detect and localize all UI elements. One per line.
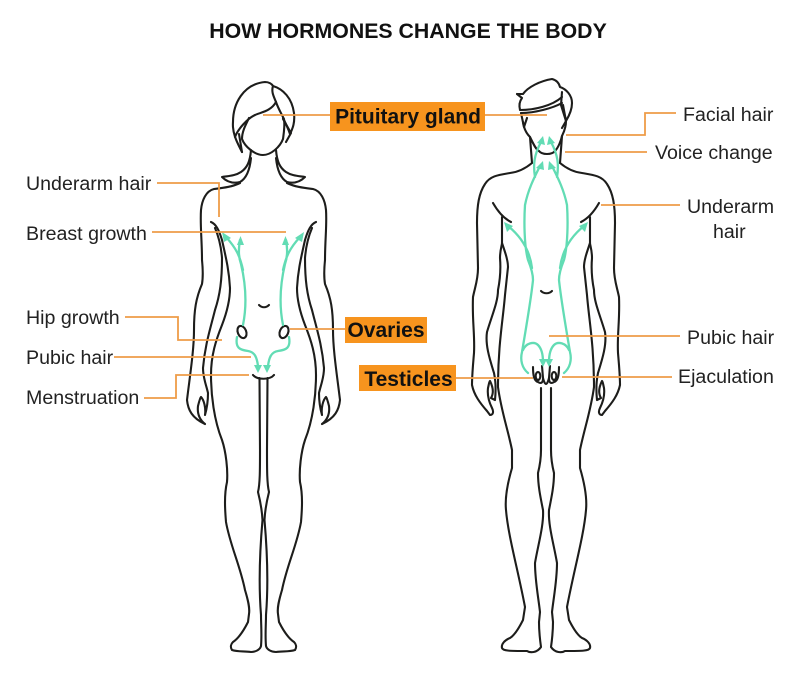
label: Pituitary gland: Pituitary gland — [335, 106, 481, 128]
female navel — [259, 305, 269, 307]
male navel — [541, 291, 552, 293]
male labels: Voice change — [655, 142, 773, 164]
male labels: Facial hair — [683, 104, 774, 126]
male genitals and testicles — [533, 366, 559, 384]
female labels: Breast growth — [26, 223, 147, 245]
title: HOW HORMONES CHANGE THE BODY — [209, 19, 607, 43]
arrowheads — [504, 136, 588, 367]
male left half of body — [472, 163, 543, 652]
female labels — [26, 173, 152, 409]
male body figure — [472, 79, 620, 652]
orange leader lines — [114, 113, 680, 398]
male labels: Pubic hair — [687, 327, 775, 349]
female right half of body (mirrored) — [264, 150, 340, 652]
female hormone arrows — [222, 232, 304, 373]
male labels: Underarm — [687, 196, 774, 218]
female left half of body — [187, 150, 262, 652]
male labels — [655, 104, 775, 388]
male head and hair — [517, 79, 572, 163]
female body figure — [187, 82, 340, 652]
male labels: Ejaculation — [678, 366, 774, 388]
male hormone arrows — [504, 136, 588, 373]
female labels: Pubic hair — [26, 347, 114, 369]
female labels: Hip growth — [26, 307, 120, 329]
female labels: Underarm hair — [26, 173, 152, 195]
label: Testicles: Testicles — [364, 368, 453, 391]
female labels: Menstruation — [26, 387, 139, 409]
left ovary — [236, 325, 248, 339]
female pelvis — [253, 375, 274, 379]
right ovary — [278, 325, 290, 339]
female head and hair — [233, 82, 294, 155]
arrowheads — [222, 232, 304, 373]
male labels: hair — [713, 221, 746, 243]
male right half of body (mirrored) — [549, 163, 620, 652]
label: Ovaries: Ovaries — [347, 319, 425, 342]
